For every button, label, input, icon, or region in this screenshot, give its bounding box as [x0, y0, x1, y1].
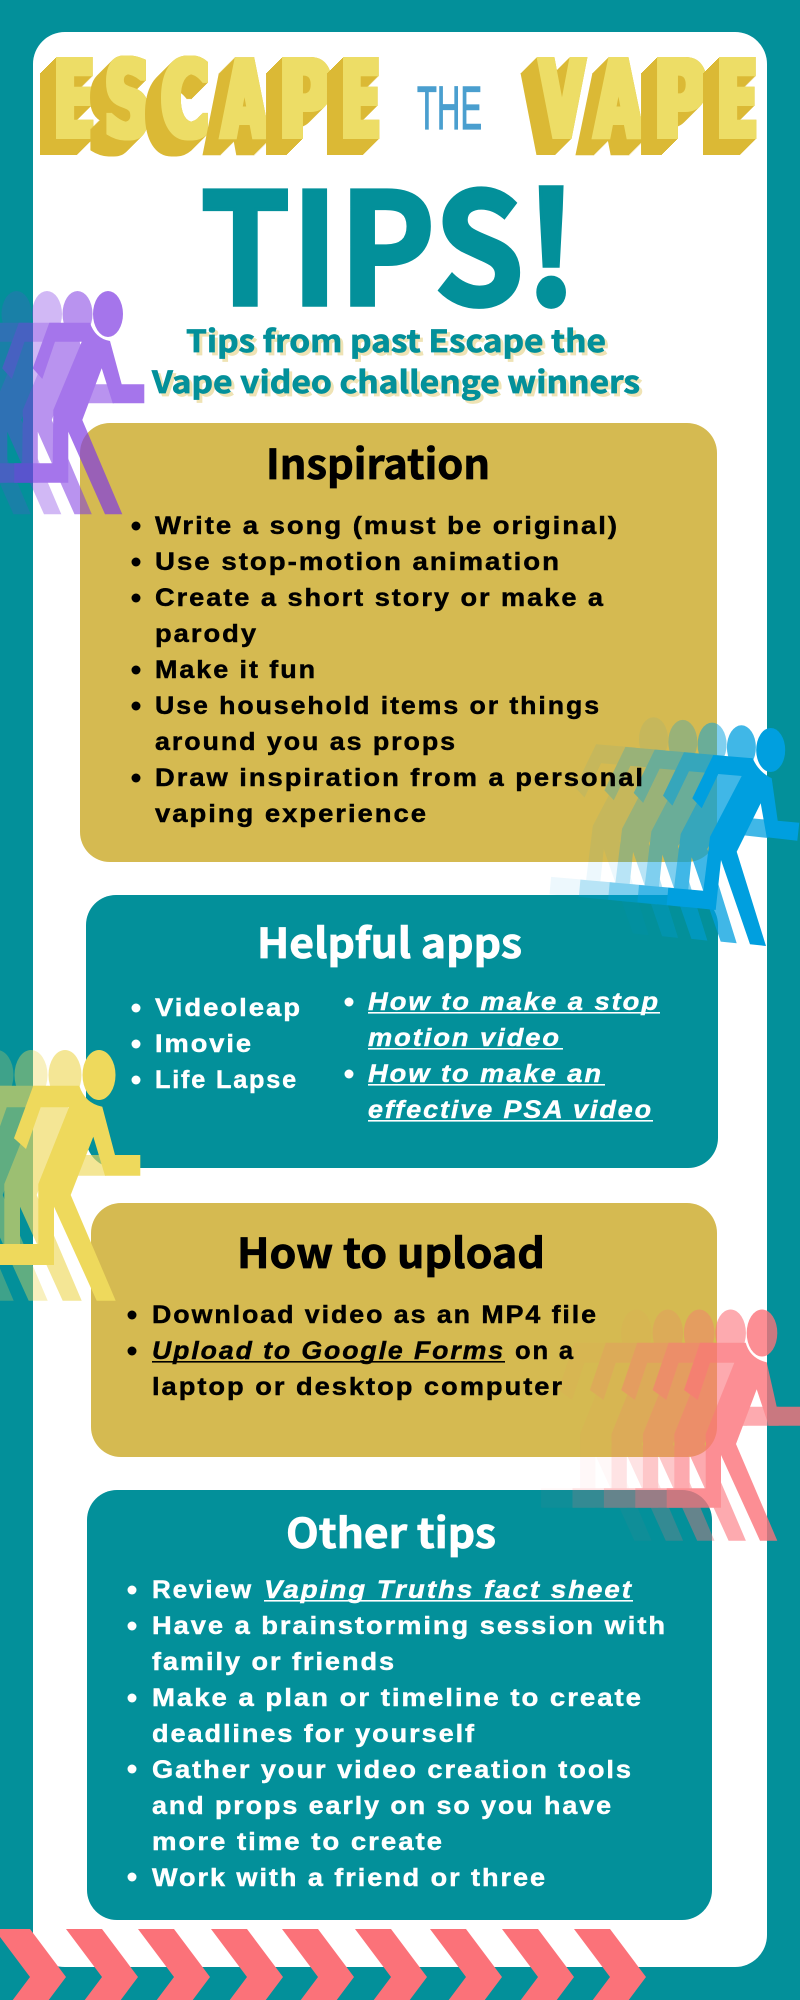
bullet list: inspiration: Use stop-motion animation: [155, 548, 561, 576]
icon: purple running figure: [0, 288, 146, 516]
bullet list: upload: [128, 1301, 598, 1401]
bullet list: other tips: Gather your video creation tools: [152, 1756, 633, 1784]
bullet list: inspiration: parody: [155, 620, 258, 648]
bullet list: other tips: and props early on so you have: [152, 1792, 613, 1820]
word: Vape: A: [595, 40, 642, 163]
title: Escape the Vape: [54, 37, 757, 163]
word: Escape: S: [105, 38, 150, 163]
panel: helpful apps background: [86, 895, 718, 1168]
bullet list: apps: Videoleap: [155, 994, 302, 1022]
heading: inspiration: Inspiration: [266, 431, 490, 491]
subtitle: [151, 317, 640, 402]
bullet list: inspiration: vaping experience: [155, 800, 428, 828]
bullet list: other tips: [128, 1576, 667, 1892]
word: Escape: C: [162, 37, 208, 162]
word: the: THE: [417, 74, 482, 142]
bullet list: upload: Download video as an MP4 file: [152, 1301, 598, 1329]
panel: how to upload background: [91, 1203, 717, 1457]
bullet list: other tips: Review: [152, 1576, 253, 1604]
bullet list: inspiration: Create a short story or make a: [155, 584, 605, 612]
bullet list: other tips: more time to create: [152, 1828, 444, 1856]
subtitle: Vape video challenge winners: [151, 358, 640, 402]
word: Vape: V: [540, 39, 584, 163]
word: Escape: [54, 37, 380, 163]
bullet list: inspiration: Draw inspiration from a personal: [155, 764, 645, 792]
subtitle: Tips from past Escape the: [186, 317, 606, 361]
bullet list: inspiration: Make it fun: [155, 656, 317, 684]
heading: TIPS!: TIPS!: [200, 125, 578, 350]
icon: yellow running figure: [0, 1048, 142, 1302]
bullet list: video links: [344, 988, 660, 1124]
bullet list: upload: on a: [515, 1337, 575, 1365]
text: how to upload: [128, 1220, 598, 1401]
chevron arrows: [0, 1929, 646, 2000]
heading: helpful apps: Helpful apps: [257, 910, 522, 970]
bullet list: video links: motion video: [368, 1024, 561, 1052]
word: Escape: E: [341, 39, 380, 163]
word: Escape: A: [222, 39, 267, 163]
bullet list: other tips: deadlines for yourself: [152, 1720, 476, 1748]
text: other tips: [128, 1500, 667, 1892]
bullet list: video links: How to make an: [368, 1060, 603, 1088]
word: Vape: E: [717, 39, 757, 163]
word: Vape: P: [654, 39, 706, 163]
bullet list: other tips: Make a plan or timeline to create: [152, 1684, 643, 1712]
bullet list: inspiration: Use household items or things: [155, 692, 601, 720]
bullet list: other tips: Have a brainstorming session with: [152, 1612, 667, 1640]
bullet list: apps: Life Lapse: [155, 1066, 298, 1094]
panel: inspiration background: [80, 423, 717, 862]
word: Vape: [540, 39, 757, 163]
bullet list: video links: How to make a stop: [368, 988, 660, 1016]
bullet list: other tips: Vaping Truths fact sheet: [264, 1576, 633, 1604]
bullet list: inspiration: [132, 512, 645, 828]
panel: other tips background: [87, 1490, 712, 1920]
heading: how to upload: How to upload: [237, 1220, 545, 1280]
bullet list: inspiration: around you as props: [155, 728, 457, 756]
heading: other tips: Other tips: [286, 1500, 496, 1560]
bullet list: other tips: Work with a friend or three: [152, 1864, 547, 1892]
text: helpful apps: [132, 910, 660, 1124]
bullet list: apps: [132, 994, 302, 1094]
bullet list: video links: effective PSA video: [368, 1096, 653, 1124]
text: inspiration: [132, 431, 645, 828]
bullet list: upload: Upload to Google Forms: [152, 1337, 505, 1365]
bullet list: other tips: family or friends: [152, 1648, 396, 1676]
bullet list: inspiration: Write a song (must be original): [155, 512, 619, 540]
icon: blue running figure: [548, 715, 800, 948]
word: Escape: E: [54, 39, 94, 163]
bullet list: upload: laptop or desktop computer: [152, 1373, 564, 1401]
icon: coral running figure: [540, 1308, 800, 1542]
word: Escape: P: [279, 39, 331, 163]
bullet list: apps: Imovie: [155, 1030, 253, 1058]
